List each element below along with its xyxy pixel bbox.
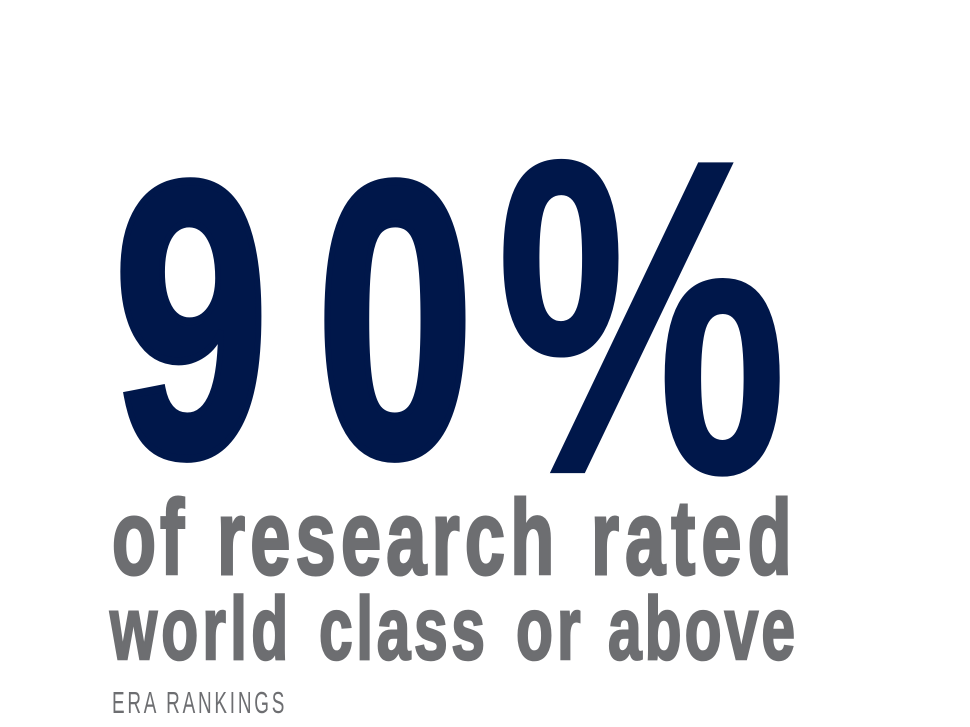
word: research: research [217,479,554,597]
word: world: world [109,579,288,679]
source label: ERA RANKINGS [112,687,284,720]
word: above: above [608,579,795,679]
word: of: of [112,479,185,597]
word: rated: rated [591,479,792,597]
percent sign: % [496,67,788,568]
digit 0: 0 [316,100,474,539]
caption line 1 [112,479,792,597]
digit 9: 9 [114,101,269,539]
word: class: class [319,579,485,679]
word: or: or [516,579,581,679]
caption line 2 [109,579,795,679]
statistic: 90% [114,67,788,568]
